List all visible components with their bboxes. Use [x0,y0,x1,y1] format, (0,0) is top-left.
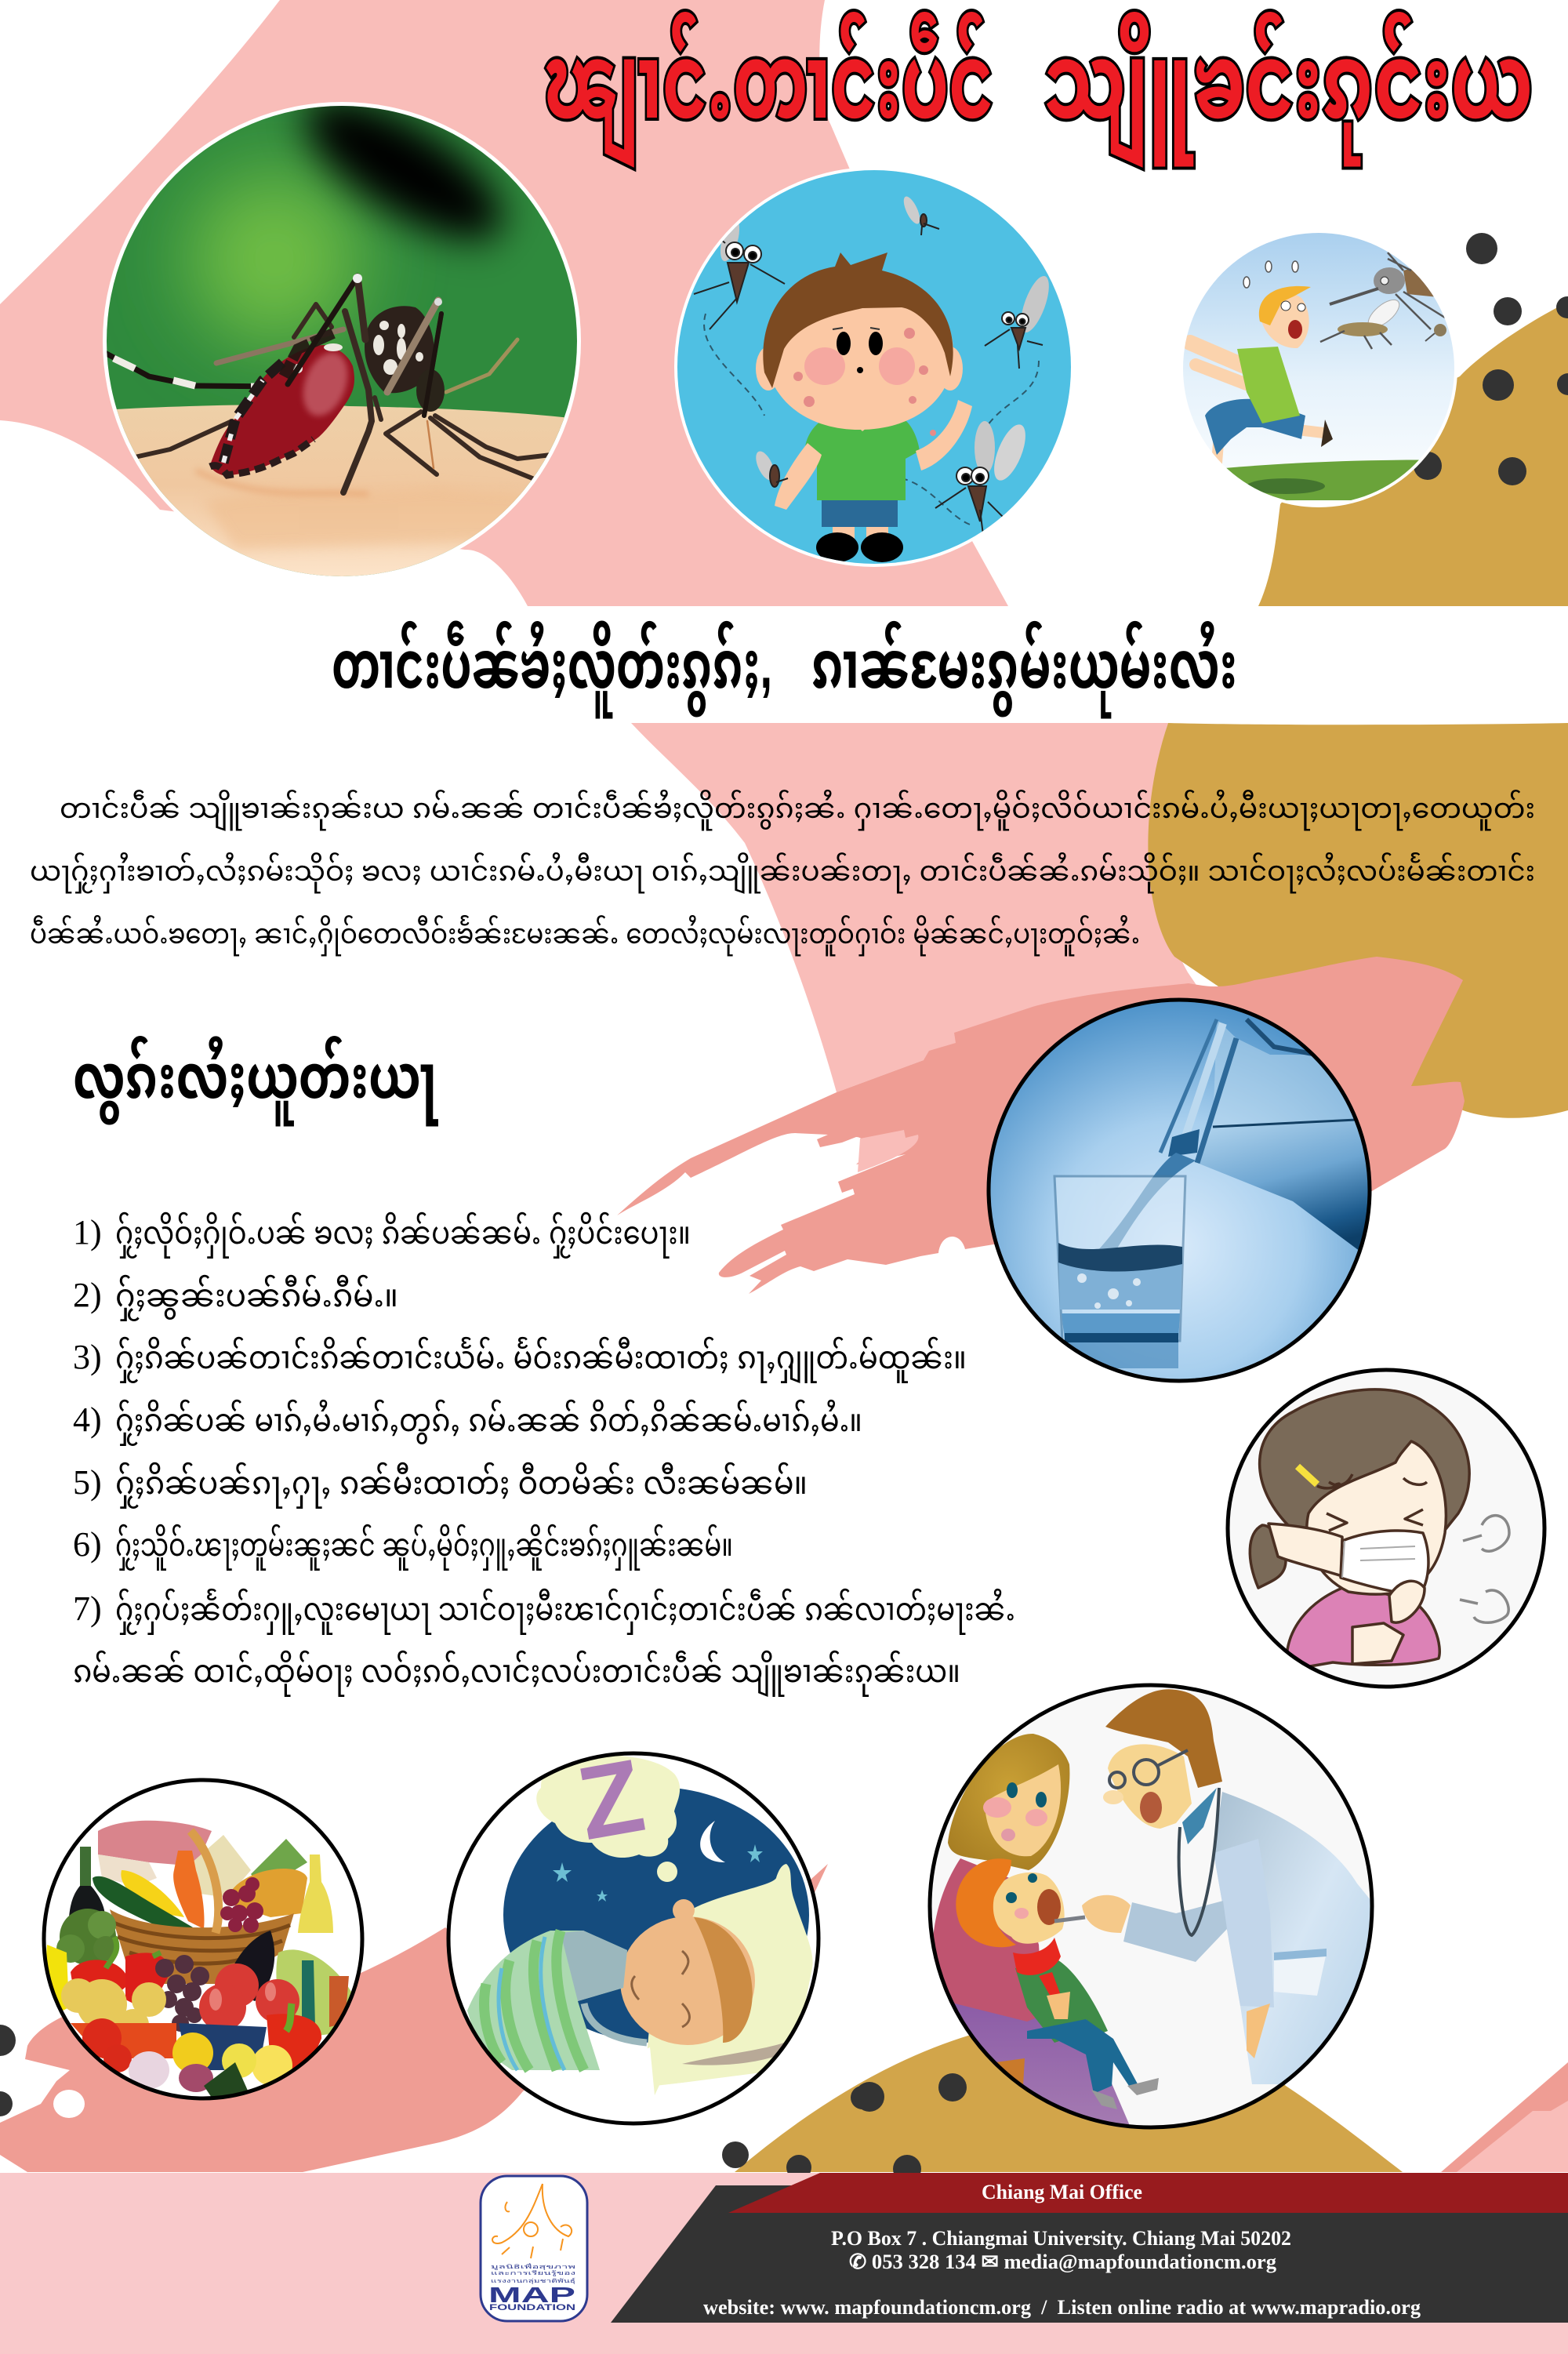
item 3: ႁႂ်ႈၵိၼ်ပၼ်တၢင်းၵိၼ်တၢင်းယႅမ်ႉ မႅဝ်းၵၼ်မီးထၢတ်ႈ ၵႃႇႁျူတ်ႉမ်ထူၼ်း။ [115,1336,967,1383]
background: top pink blob [0,0,1008,606]
intro paragraph: ပဵၼ်ၼႆႉယဝ်ႉၶတေႃႇ ၼၢင်ႇႁိုဝ်တေလီဝ်းၶႅၼ်းမႄးၼၼ်ႉ တေလႆႈလုမ်းလႃးတူဝ်ႁၢဝ်း မိုၼ်ၼင်ႇပႃးတူဝ်ႈၼႆႉ [30,914,1140,957]
child shoes [1091,2090,1117,2109]
intro paragraph: ယႃႁႂ်ႈႁၢႆးၶၢတ်ႇလႆႈၵမ်းသိုဝ်ႈ ၶလႈ ယၢင်းၵမ်ႉပႆႇမီးယႃ ဝၢၵ်ႇသျိူၼ်းပၼ်းတႃႇ တၢင်းပဵၼ်ၼႆႉၵမ်းသိုဝ်ႈ။ သၢင်ဝႃႈလႆႈလပ်းမႅၼ်းတၢင်း [30,852,1535,894]
water stream [1098,1153,1196,1252]
background: bottom left salmon blob [0,1927,596,2172]
item 1: 1) [73,1213,102,1251]
logo: MAP Foundation: MAP [488,2283,575,2307]
background: middle right tan blob [1148,723,1568,1118]
illustration circle: doctor examines child [930,1685,1372,2133]
illustration circle: girl with face mask coughing [1228,1370,1544,1687]
glass [1054,1176,1185,1341]
mother face [985,1764,1061,1856]
item 6: 6) [73,1525,102,1564]
footer dark panel [611,2185,1568,2323]
mosquito head [416,369,445,412]
footer red banner [728,2173,1568,2213]
pink patch in brush stroke [858,1130,918,1172]
mosquito hind leg banded [105,353,283,387]
item 1: ႁႂ်ႈလိုဝ်ႈႁိုဝ်ႉပၼ် ၶလႈ ၵိၼ်ပၼ်ၼမ်ႉ ႁႂ်ႈပိင်းပေႃး။ [115,1212,691,1259]
doctor hand and spatula [1054,1917,1085,1921]
heading: dengue and how to control: ၵၢၼ်မႄးၵွမ်းယုမ်းလႆး [811,620,1237,718]
chair [953,2000,1129,2125]
mosquito thorax [365,306,434,393]
salmon tip beside sleep circle [804,1864,828,1898]
background: top right tan blob [1258,302,1568,606]
logo: MAP Foundation: FOUNDATION [489,2303,575,2312]
footer: website and radio: website: www. mapfoundationcm.org / Listen online radio at www.mapradio.org [703,2296,1421,2319]
child hand on chest [1047,1992,1070,2019]
jug [1213,1021,1353,1126]
child head [991,1873,1065,1944]
photo circle: mosquito on skin [102,72,584,584]
big mosquitoes [1320,252,1446,349]
item 7: 7) [73,1589,102,1628]
intro paragraph: တၢင်းပဵၼ် သျိူၶၢၼ်းၵုၼ်းယ ၵမ်ႉၼၼ် တၢင်းပဵၼ်ၶႆႈလိူတ်းၵွၵ်ႈၼႆႉ ႁၢၼ်ႉတေႃႇမိူဝ်ႈလိဝ်ယၢင်းၵမ်ႉပႆႇမီးယႃႈယႃတႃႇတေယူတ်း [60,789,1535,831]
footer band [0,2173,1568,2354]
item 4: 4) [73,1400,102,1439]
item 7: ႁႂ်ႈႁပ်ႈၼႅတ်းႁူႇလူးမေႃယႃ သၢင်ဝႃႈမီးၽၢင်ႁၢင်ႈတၢင်းပဵၼ် ၵၼ်လၢတ်ႈမႃးၼႆႉ [115,1588,1015,1635]
child scarf [1013,1938,1061,1995]
treatment advice list [73,1212,1015,1697]
footer: phone and email: ✆ 053 328 134 ✉ media@mapfoundationcm.org [849,2250,1276,2273]
mosquitoes [694,194,1054,541]
mosquito abdomen [210,345,354,476]
heading: dengue and how to control: တၢင်းပဵၼ်ၶႆႈလိူတ်းၵွၵ်ႈ, [332,620,772,718]
boy [756,252,972,562]
white oval [53,2090,85,2118]
illustration circle: boy with mosquito bites [674,165,1076,569]
photo circle: basket of healthy food [44,1780,362,2098]
logo: MAP Foundation: มูลนิธิเพื่อสุขภาพ [491,2263,576,2271]
item 2: ႁႂ်ႈၼွၼ်းပၼ်ၵီမ်ႉၵီမ်ႉ။ [115,1274,398,1321]
title: ၽျၢင်ႉတၢင်းပဵင် [544,11,993,169]
mosquito front legs over body [288,274,442,416]
intro paragraph [30,789,1535,957]
child sweater [1015,1958,1108,2043]
item 4: ႁႂ်ႈၵိၼ်ပၼ် မၢၵ်ႇမႆႉမၢၵ်ႇတွၵ်ႇ ၵမ်ႉၼၼ် ၵိတ်ႇၵိၼ်ၼမ်ႉမၢၵ်ႇမႆႉ။ [115,1399,862,1446]
background: bottom tan blob [735,2007,1403,2172]
subheading: how to care: လွၵ်းလႆႈယူတ်းယႃ [73,1035,439,1127]
illustration circle: man running from mosquitoes [1180,230,1458,508]
item 6: ႁႂ်ႈသိူဝ်ႉၽႃႈတူမ်းၼူႈၼင် ၼူပ်ႇမိုဝ်ႈႁူႇၼိူင်းၶၵ်ႈႁူၼ်းၼမ်။ [115,1524,733,1571]
mosquito legs [135,304,551,492]
item 7 continued: ၵမ်ႉၼၼ် ထၢင်ႇထိုမ်ဝႃႈ လဝ်ႈၵဝ်ႇလၢင်ႈလပ်းတၢင်းပဵၼ် သျိူၶၢၼ်းၵုၼ်းယ။ [73,1650,960,1697]
item 5: 5) [73,1463,102,1502]
mother body [932,1858,1043,2022]
background: middle pink blob [631,723,1200,1092]
logo: MAP Foundation: แรงงานกลุ่มชาติพันธุ์ [491,2277,575,2285]
background: bottom right salmon [1441,2062,1568,2172]
item 5: ႁႂ်ႈၵိၼ်ပၼ်ၵႃႇႁႃႇ ၵၼ်မီးထၢတ်ႈ ဝီတမိၼ်း လီးၼမ်ၼမ်။ [115,1462,808,1509]
footer: address: P.O Box 7 . Chiangmai University. Chiang Mai 50202 [831,2227,1291,2250]
running man [1190,286,1333,463]
letter Z: Z [570,1737,652,1862]
mother hair [948,1734,1069,1870]
logo: MAP Foundation: และการเรียนรู้ของ [491,2269,575,2277]
logo: MAP Foundation [481,2176,587,2321]
doctor coat [1214,1792,1372,2117]
doctor head [1108,1744,1192,1829]
item 2: 2) [73,1276,102,1314]
background: salmon brush stroke [617,957,1465,1294]
item 3: 3) [73,1338,102,1376]
photo circle: water pouring into glass [989,1000,1380,1381]
child jeans [1027,2019,1141,2094]
footer: office heading: Chiang Mai Office [982,2181,1142,2203]
illustration circle: sleeping child [448,1737,818,2133]
background: bottom right pink [1457,2101,1568,2172]
